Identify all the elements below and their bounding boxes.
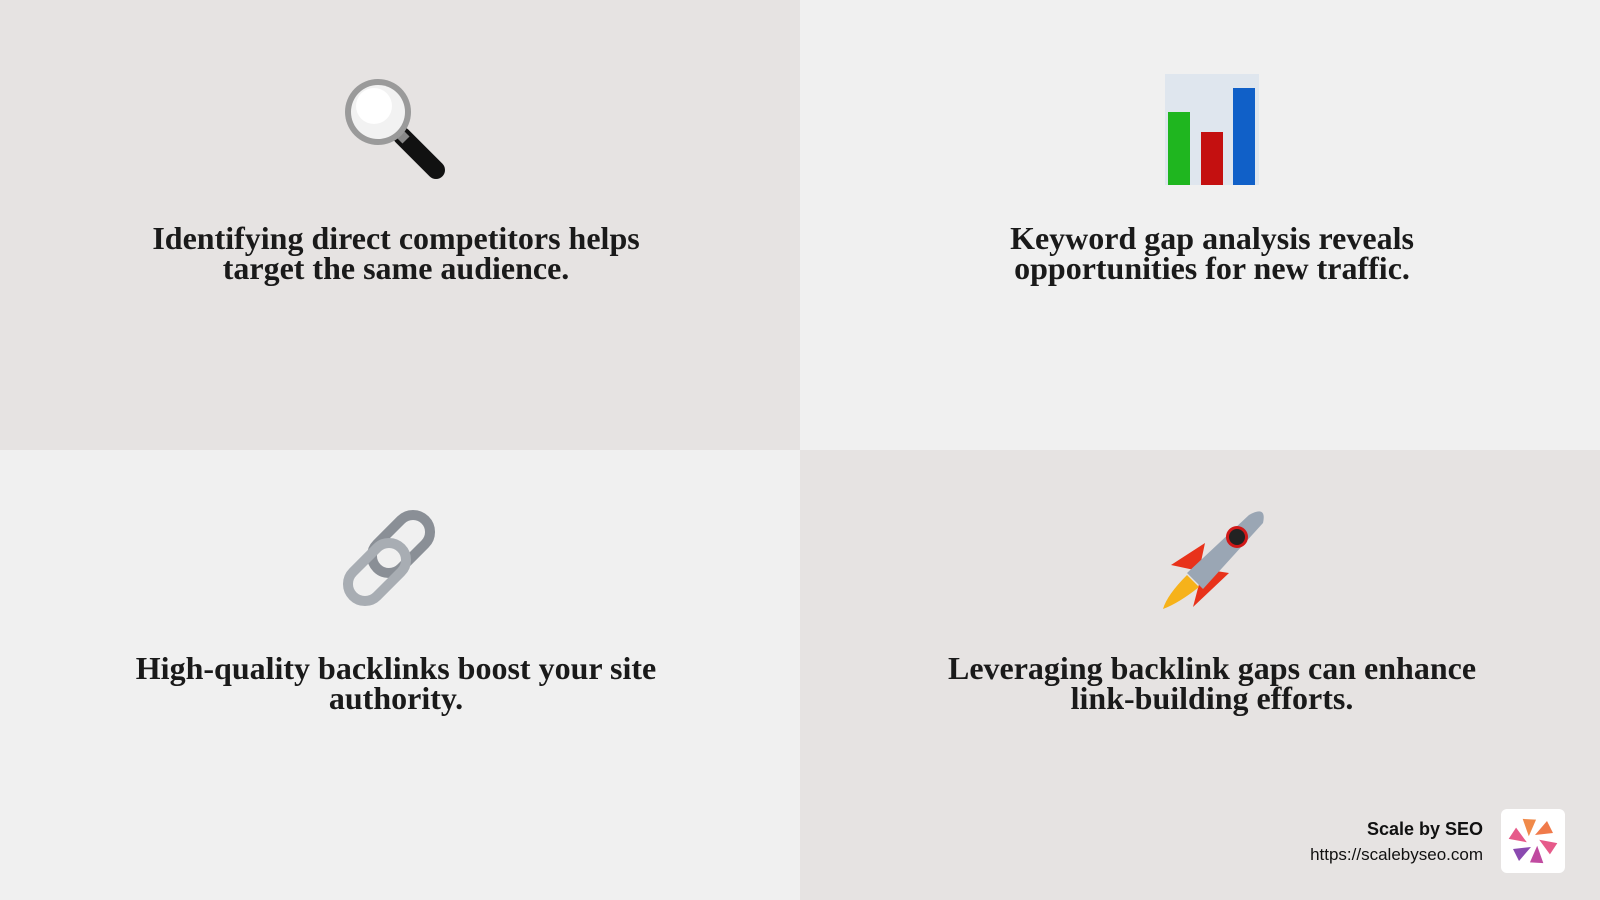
text: competitors: Identifying direct competitors helps <box>152 220 640 256</box>
icon: rocket <box>1163 511 1264 609</box>
brand text: Scale by SEO <box>1367 819 1483 839</box>
panel: keyword gap <box>800 0 1600 450</box>
panel: backlinks <box>0 450 800 900</box>
text: keyword gap: Keyword gap analysis reveals <box>1010 220 1414 256</box>
panel: competitors <box>0 0 800 450</box>
brand text <box>1310 819 1483 864</box>
logo <box>1501 809 1565 873</box>
text: competitors: target the same audience. <box>223 250 569 286</box>
icon: magnifying glass <box>345 79 445 179</box>
text: backlink gaps: link-building efforts. <box>1071 680 1353 716</box>
icon: bar chart <box>1165 74 1259 185</box>
brand text: https://scalebyseo.com <box>1310 845 1483 864</box>
text: backlinks: authority. <box>329 680 463 716</box>
text: backlink gaps: Leveraging backlink gaps can enhance <box>948 650 1476 686</box>
icon: chain link <box>343 510 435 606</box>
text: competitors <box>152 220 640 286</box>
text: backlink gaps <box>948 650 1476 716</box>
text: keyword gap <box>1010 220 1414 286</box>
panel: backlink gaps <box>800 450 1600 900</box>
text: backlinks <box>136 650 656 716</box>
text: backlinks: High-quality backlinks boost your site <box>136 650 656 686</box>
text: keyword gap: opportunities for new traffic. <box>1014 250 1410 286</box>
